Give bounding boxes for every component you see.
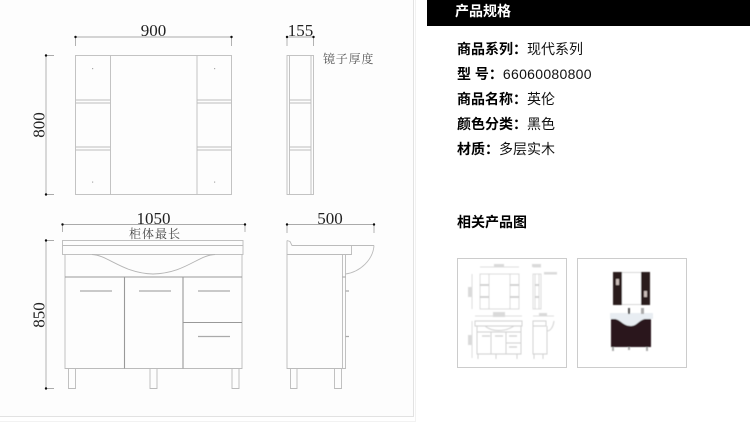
panel: technical drawing (0, 0, 416, 422)
dimension: mirror width 900 (74, 21, 233, 46)
dimension: vanity height 850: 850 (30, 302, 48, 328)
dimension: vanity height 850 (30, 239, 54, 390)
dimension: mirror width 900: 900 (141, 21, 166, 40)
mirror cabinet (613, 272, 650, 305)
spec: product series: 商品系列：现代系列 (457, 41, 583, 57)
spec: colour: 颜色分类：黑色 (457, 116, 555, 132)
vanity side view (287, 240, 374, 388)
mirror cabinet side view (287, 56, 314, 194)
heading bar: product specifications: 产品规格 (455, 3, 511, 19)
heading bar: product specifications (427, 0, 750, 26)
spec: model number: 型 号：66060080800 (457, 66, 592, 82)
dimension: vanity width 1050 (61, 209, 246, 232)
dimension: mirror depth 155 (286, 21, 315, 46)
vanity front view (62, 240, 243, 388)
spec: product name: 商品名称：英伦 (457, 91, 555, 107)
dimension: mirror height 800: 800 (30, 112, 48, 138)
label: longest cabinet body: 柜体最长 (129, 226, 181, 241)
heading: related products: 相关产品图 (457, 214, 527, 230)
spec: material: 材质：多层实木 (457, 141, 555, 157)
mirror cabinet front view (76, 56, 232, 194)
thumbnail: dimension drawing (457, 258, 567, 368)
dimension: vanity depth 500 (286, 209, 375, 233)
dimension: mirror depth 155: 155 (288, 21, 313, 40)
spec list (457, 41, 592, 157)
dimension: vanity width 1050: 1050 (136, 209, 170, 228)
thumbnail: product photo (577, 258, 687, 368)
dimension: vanity depth 500: 500 (317, 209, 343, 228)
dimension: mirror height 800 (30, 54, 54, 196)
vanity (610, 308, 653, 351)
label: mirror thickness: 镜子厚度 (323, 51, 374, 66)
